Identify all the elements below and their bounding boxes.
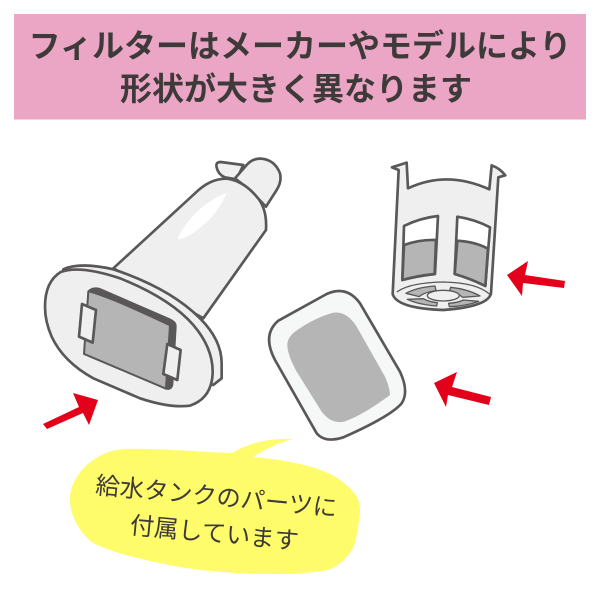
illustration: water tank cap filter — [45, 159, 281, 406]
right filter mesh — [455, 241, 488, 286]
title text — [29, 28, 571, 107]
base hub — [427, 290, 459, 301]
title banner — [14, 14, 586, 120]
right clip — [163, 344, 181, 380]
speech bubble text — [94, 472, 338, 556]
speech bubble text: 付属しています — [129, 512, 300, 556]
pad outline — [269, 291, 405, 440]
cup body — [392, 163, 505, 310]
flange back edge — [63, 265, 222, 385]
left clip — [79, 304, 96, 343]
filter mesh — [84, 291, 170, 389]
arrow: to cap filter — [43, 393, 98, 429]
left window — [402, 216, 438, 280]
title text: フィルターはメーカーやモデルにより — [29, 28, 571, 64]
flange front face — [45, 270, 213, 406]
illustration: flat filter pad — [269, 291, 405, 440]
left filter mesh — [402, 240, 436, 280]
filter shadow — [88, 287, 177, 390]
illustration: cup filter — [392, 163, 505, 310]
title text: 形状が大きく異なります — [120, 71, 472, 107]
speech bubble — [70, 439, 360, 574]
speech bubble text: 給水タンクのパーツに — [94, 472, 338, 523]
cap tab — [216, 162, 243, 179]
right window — [455, 217, 490, 286]
arrow: to cup filter — [507, 261, 565, 296]
tank body — [113, 179, 266, 318]
base rim — [397, 282, 489, 294]
arrow: to flat filter — [434, 372, 491, 407]
body highlight — [177, 193, 227, 239]
base vents — [406, 286, 480, 307]
cap neck — [235, 159, 281, 207]
pad mesh — [287, 312, 390, 422]
